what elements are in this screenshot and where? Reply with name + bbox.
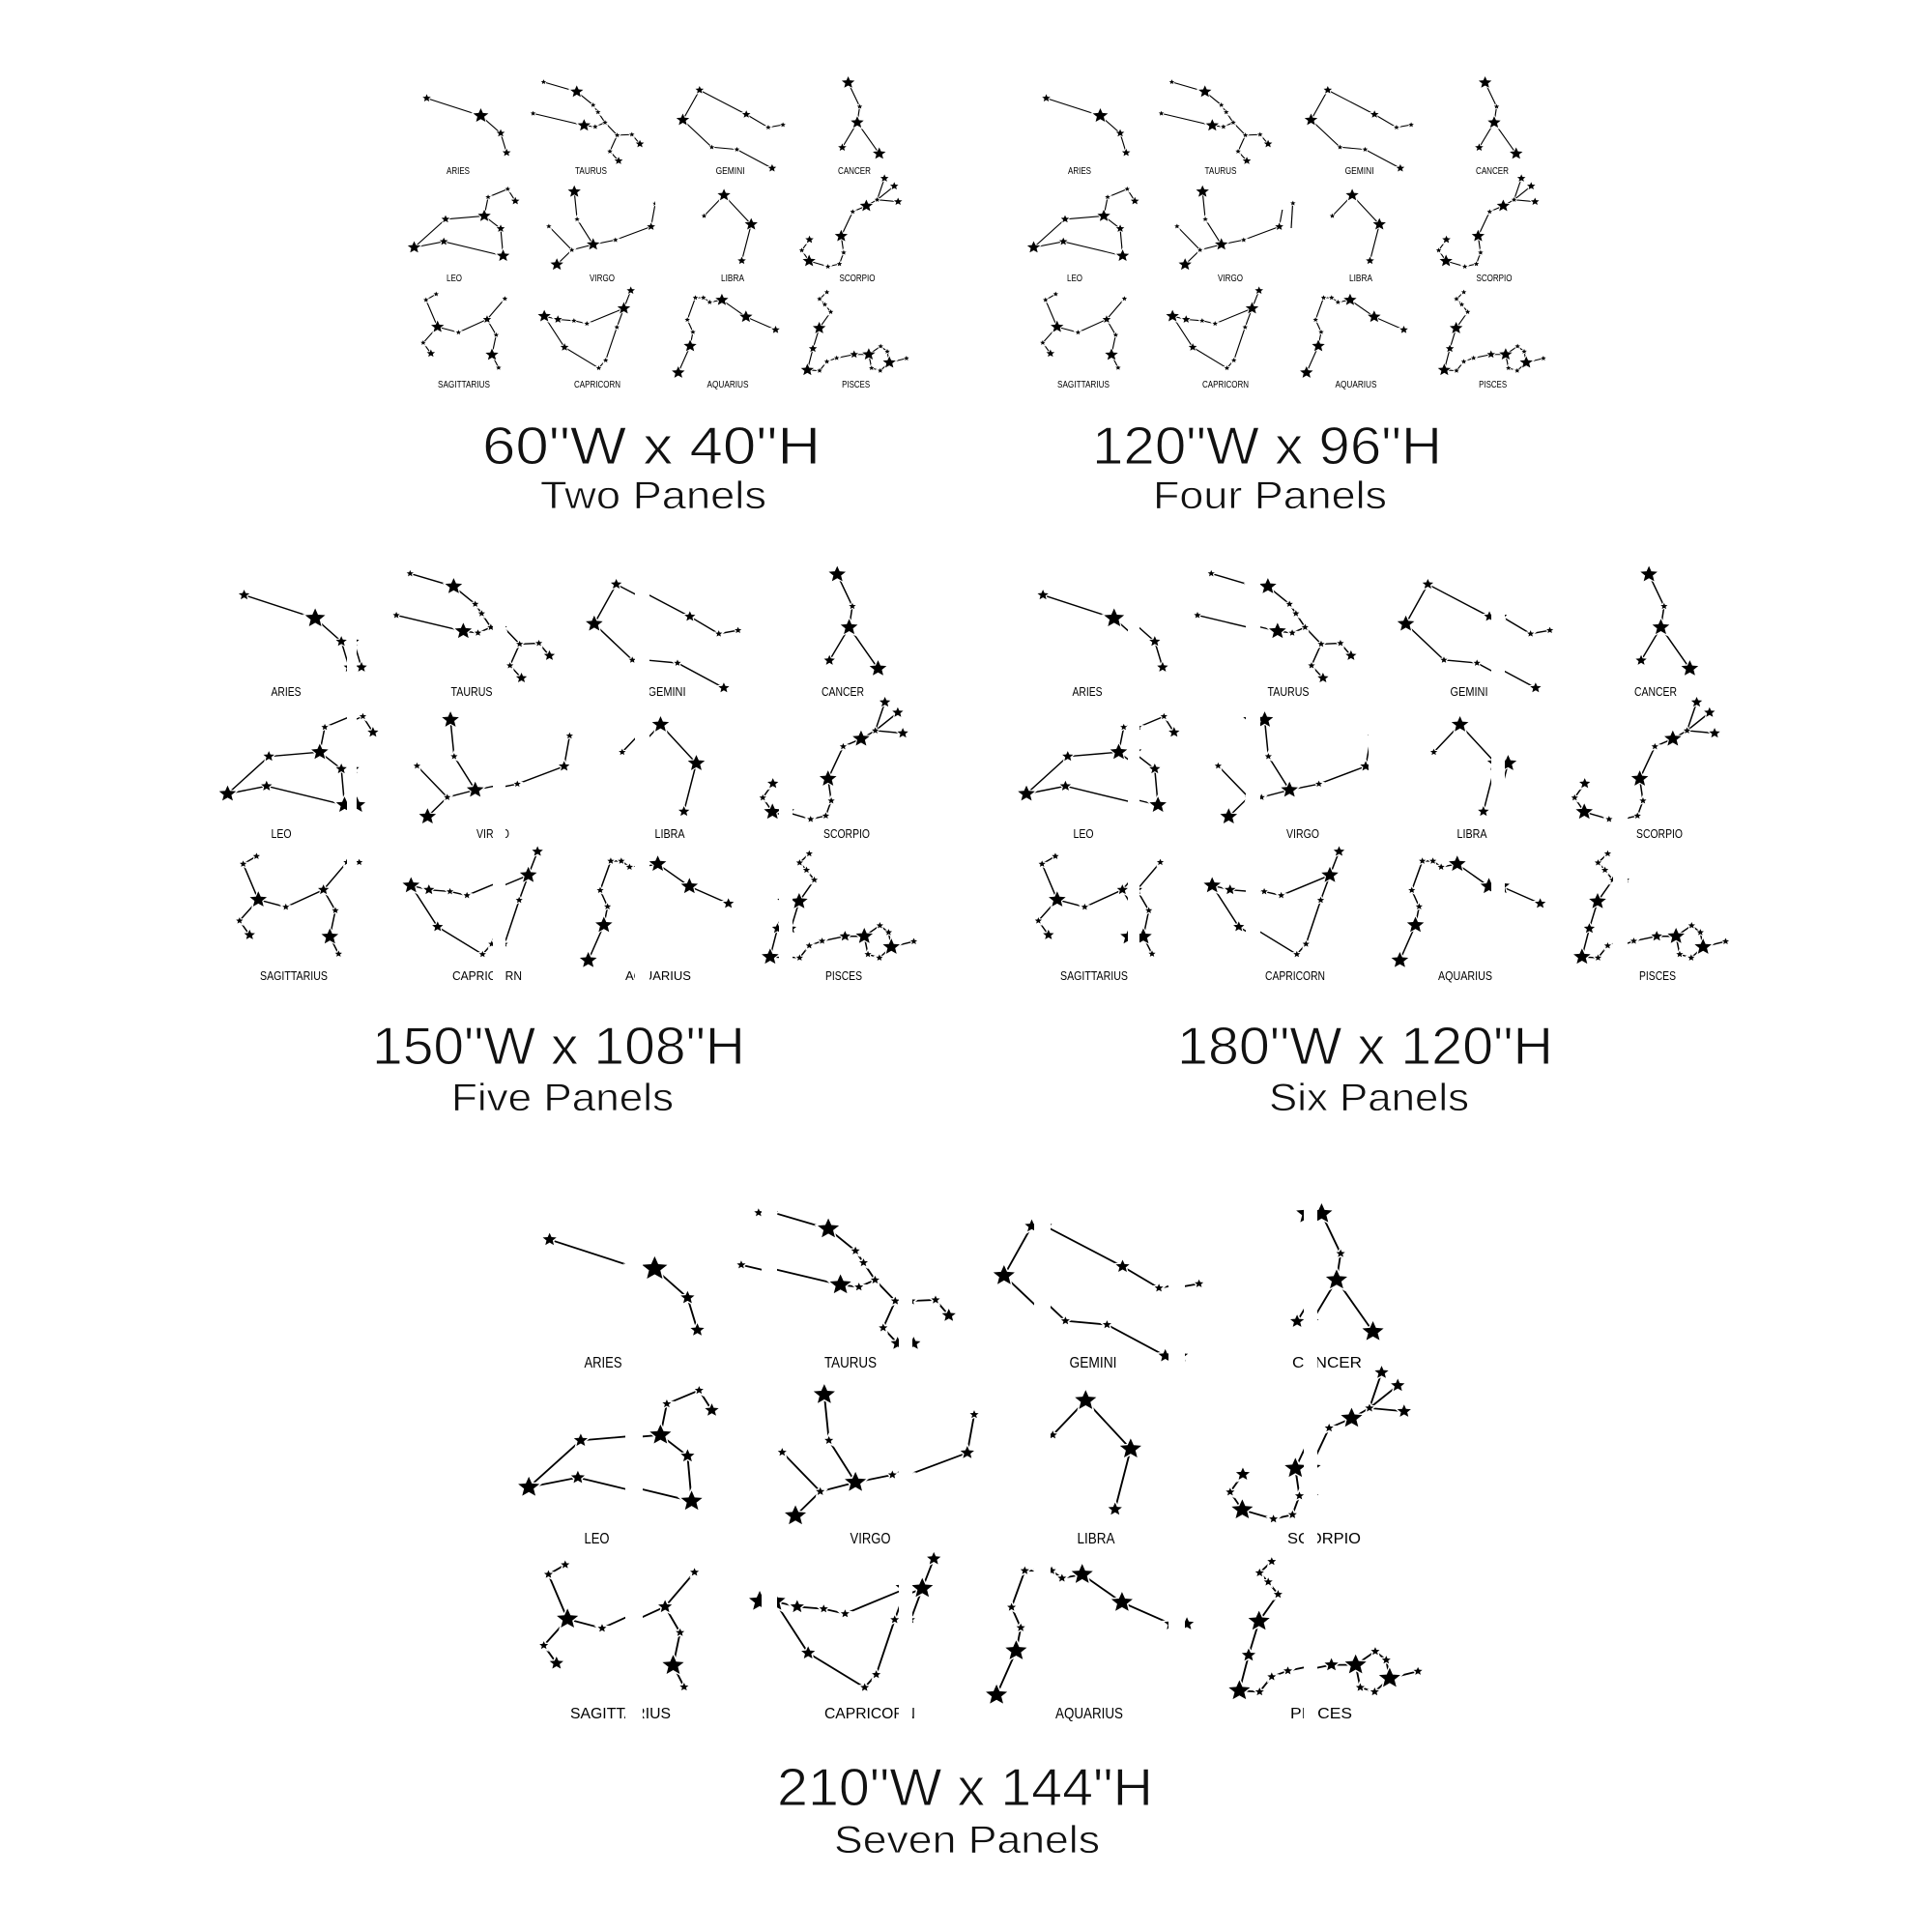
constellation: capricorn	[402, 847, 543, 983]
constellation: scorpio: SCORPIO	[839, 274, 876, 284]
constellation: aquarius: AQUARIUS	[707, 380, 749, 390]
constellation: cancer	[1634, 566, 1698, 699]
constellation: leo	[518, 1386, 719, 1547]
constellation: aquarius	[1392, 855, 1545, 983]
constellation: scorpio: SCORPIO	[823, 826, 870, 841]
constellation: gemini: GEMINI	[1069, 1355, 1117, 1371]
size heading: 210W x 144H: 210"W x 144"H	[777, 1757, 1153, 1817]
constellation: virgo: VIRGO	[1286, 826, 1319, 841]
constellation: leo: LEO	[1067, 274, 1082, 284]
constellation: capricorn: CAPRICORN	[574, 380, 620, 390]
constellation: pisces: PISCES	[825, 968, 862, 983]
constellation: capricorn	[749, 1552, 940, 1722]
constellation: cancer	[1475, 76, 1522, 177]
constellation: virgo: VIRGO	[590, 274, 615, 284]
constellation: pisces: PISCES	[1479, 380, 1507, 390]
caption: six panels: Six Panels	[1269, 1077, 1469, 1119]
caption: two panels: Two Panels	[540, 475, 766, 517]
constellation: virgo	[778, 1384, 979, 1547]
constellation: aquarius: AQUARIUS	[1336, 380, 1377, 390]
constellation: aries	[422, 94, 510, 177]
constellation: leo: LEO	[1073, 826, 1094, 841]
constellation: cancer: CANCER	[1476, 166, 1509, 177]
constellation: aquarius: AQUARIUS	[1438, 968, 1492, 983]
constellation: libra	[1051, 1390, 1141, 1543]
constellation: gemini: GEMINI	[648, 684, 686, 699]
constellation: sagittarius: SAGITTARIUS	[1057, 380, 1110, 390]
constellation: gemini	[1305, 86, 1414, 177]
constellation: gemini	[1398, 579, 1553, 699]
constellation: leo	[1018, 713, 1179, 841]
constellation: capricorn	[537, 286, 635, 390]
constellation: leo: LEO	[584, 1531, 609, 1547]
constellation: aries: ARIES	[447, 166, 470, 177]
constellation: leo: LEO	[271, 826, 292, 841]
constellation: cancer	[1290, 1203, 1384, 1371]
constellation: aries: ARIES	[584, 1355, 622, 1371]
constellation: aries: ARIES	[1073, 684, 1103, 699]
constellation: sagittarius	[1040, 292, 1127, 390]
constellation: leo	[219, 713, 379, 841]
constellation: aquarius	[672, 294, 780, 390]
constellation: libra	[1430, 716, 1516, 841]
constellation: aries	[1037, 590, 1168, 699]
constellation: virgo	[1215, 711, 1374, 841]
constellation: capricorn: CAPRICORN	[824, 1706, 915, 1722]
size heading: 180W x 120H: 180"W x 120"H	[1177, 1016, 1553, 1076]
constellation: pisces	[762, 851, 917, 983]
constellation: cancer: CANCER	[838, 166, 871, 177]
caption: five panels: Five Panels	[451, 1077, 674, 1119]
constellation: sagittarius: SAGITTARIUS	[438, 380, 490, 390]
constellation: sagittarius: SAGITTARIUS	[260, 968, 328, 983]
constellation: virgo	[1174, 186, 1296, 284]
constellation: gemini	[586, 579, 741, 699]
constellation: gemini	[994, 1220, 1203, 1371]
constellation: scorpio: SCORPIO	[1477, 274, 1513, 284]
constellation: leo	[408, 187, 520, 284]
constellation: aquarius: AQUARIUS	[1055, 1706, 1123, 1722]
constellation: taurus	[392, 570, 555, 699]
size heading: 60W x 40H: 60"W x 40"H	[482, 416, 821, 476]
caption: four panels: Four Panels	[1153, 475, 1387, 517]
constellation: taurus	[1194, 570, 1357, 699]
constellation: taurus	[531, 79, 644, 177]
constellation: aries	[543, 1233, 705, 1371]
constellation: aries: ARIES	[271, 684, 302, 699]
constellation: cancer: CANCER	[1634, 684, 1677, 699]
constellation: taurus: TAURUS	[1268, 684, 1310, 699]
constellation: cancer	[822, 566, 886, 699]
constellation: virgo: VIRGO	[1218, 274, 1243, 284]
constellation: gemini: GEMINI	[716, 166, 745, 177]
constellation: scorpio: SCORPIO	[1636, 826, 1683, 841]
panel: four panels layout	[1027, 76, 1546, 517]
constellation: sagittarius: SAGITTARIUS	[570, 1706, 671, 1722]
constellation: libra: LIBRA	[1077, 1531, 1115, 1547]
panel: six panels layout	[1018, 566, 1729, 1119]
constellation: pisces	[801, 290, 909, 390]
constellation: scorpio	[760, 697, 908, 841]
constellation: scorpio	[1572, 697, 1720, 841]
constellation: libra: LIBRA	[1349, 274, 1372, 284]
constellation: aquarius	[1300, 294, 1408, 390]
constellation: pisces	[1573, 851, 1729, 983]
constellation: taurus	[1159, 79, 1272, 177]
constellation: pisces	[1228, 1557, 1423, 1722]
constellation: libra: LIBRA	[1457, 826, 1487, 841]
constellation: sagittarius	[1035, 852, 1164, 983]
constellation: scorpio	[1226, 1366, 1411, 1547]
constellation: scorpio	[1436, 174, 1540, 284]
constellation: virgo: VIRGO	[851, 1531, 891, 1547]
panel: seven panels layout	[518, 1203, 1423, 1861]
constellation: virgo	[414, 711, 573, 841]
constellation: gemini: GEMINI	[1345, 166, 1374, 177]
constellation: sagittarius	[539, 1561, 699, 1722]
constellation: pisces	[1438, 290, 1546, 390]
constellation: taurus: TAURUS	[824, 1355, 877, 1371]
panel: two panels layout	[408, 76, 909, 517]
constellation: libra	[702, 188, 758, 284]
constellation: cancer: CANCER	[822, 684, 864, 699]
constellation: pisces: PISCES	[842, 380, 870, 390]
constellation: libra	[619, 716, 705, 841]
constellation: pisces: PISCES	[1290, 1706, 1352, 1722]
constellation: taurus: TAURUS	[450, 684, 493, 699]
constellation: scorpio	[799, 174, 903, 284]
constellation: pisces: PISCES	[1639, 968, 1676, 983]
constellation: aries	[239, 590, 367, 699]
constellation: cancer	[838, 76, 885, 177]
constellation: aries	[1042, 94, 1130, 177]
constellation: scorpio: SCORPIO	[1287, 1531, 1361, 1547]
constellation: gemini: GEMINI	[1450, 684, 1488, 699]
constellation: taurus: TAURUS	[575, 166, 607, 177]
constellation: aries: ARIES	[1068, 166, 1091, 177]
size heading: 120W x 96H: 120"W x 96"H	[1092, 416, 1442, 476]
constellation: aquarius	[580, 855, 734, 983]
constellation: virgo: VIRGO	[476, 826, 509, 841]
constellation: taurus: TAURUS	[1204, 166, 1237, 177]
constellation: capricorn: CAPRICORN	[1202, 380, 1249, 390]
constellation: aquarius: AQUARIUS	[625, 968, 691, 983]
constellation: gemini	[677, 86, 786, 177]
constellation: capricorn: CAPRICORN	[1265, 968, 1325, 983]
constellation: libra: LIBRA	[655, 826, 685, 841]
constellation: sagittarius	[236, 852, 362, 983]
constellation: libra	[1330, 188, 1386, 284]
constellation: aquarius	[986, 1564, 1194, 1722]
panel: five panels layout	[219, 566, 917, 1119]
constellation: leo	[1027, 187, 1139, 284]
constellation: sagittarius: SAGITTARIUS	[1060, 968, 1128, 983]
constellation: capricorn	[1203, 847, 1344, 983]
constellation: capricorn: CAPRICORN	[452, 968, 522, 983]
size heading: 150W x 108H: 150"W x 108"H	[372, 1016, 745, 1076]
constellation: leo: LEO	[447, 274, 462, 284]
constellation: virgo	[546, 186, 658, 284]
constellation: cancer: CANCER	[1292, 1355, 1362, 1371]
constellation: sagittarius	[420, 292, 507, 390]
constellation: libra: LIBRA	[721, 274, 744, 284]
caption: seven panels: Seven Panels	[834, 1819, 1100, 1861]
constellation: capricorn	[1166, 286, 1263, 390]
constellation: taurus	[736, 1208, 956, 1371]
